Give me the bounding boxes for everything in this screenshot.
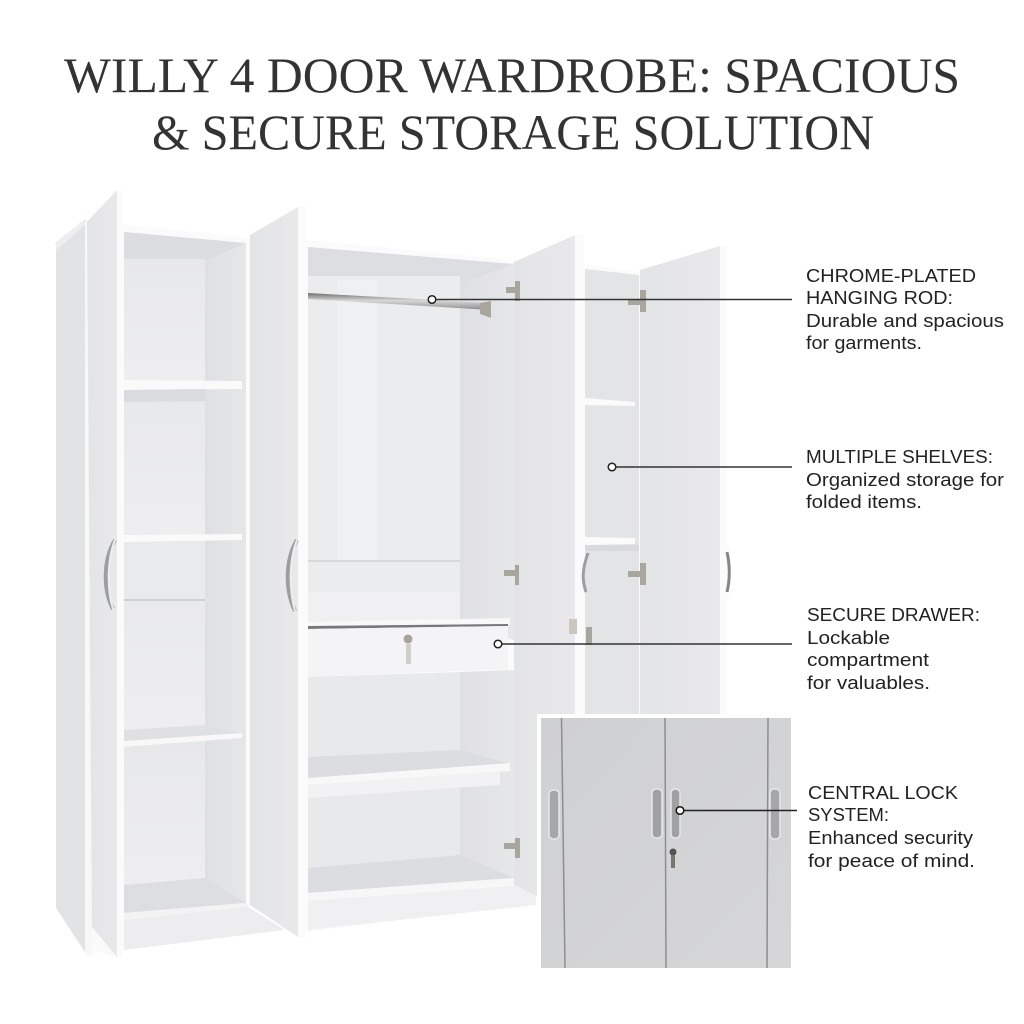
label: central lock: for peace of mind. — [808, 851, 975, 871]
callout: hanging rod line — [428, 296, 792, 303]
drawer lock — [404, 634, 412, 664]
shelf upper — [585, 398, 635, 406]
callout: drawer line — [494, 640, 792, 648]
label: hanging rod: for garments. — [806, 333, 922, 353]
label: central lock: Enhanced security — [808, 828, 973, 848]
label: central lock: SYSTEM: — [808, 805, 889, 825]
door 3 — [504, 235, 584, 915]
label: multiple shelves — [806, 447, 1004, 512]
shelf lower — [585, 537, 635, 545]
title — [64, 47, 960, 160]
door 1 — [87, 190, 123, 957]
door 2 handle — [288, 540, 297, 611]
inset handles — [549, 789, 780, 839]
label: hanging rod: CHROME-PLATED — [806, 266, 976, 286]
callout: lock line — [676, 807, 797, 814]
door seams — [562, 718, 768, 968]
inset: central lock close-up — [537, 714, 794, 972]
inset key lock — [670, 848, 676, 868]
lower compartment — [308, 670, 536, 930]
inner handle — [583, 553, 588, 592]
door 4 handle — [727, 552, 729, 592]
left side panel — [55, 219, 117, 957]
shelf 2 — [124, 534, 242, 736]
shelf 3 — [124, 725, 242, 885]
right compartment — [583, 264, 640, 714]
label: secure drawer — [807, 605, 980, 693]
label: secure drawer: SECURE DRAWER: — [807, 605, 980, 625]
label: central lock: CENTRAL LOCK — [808, 783, 958, 803]
door 4 — [628, 246, 729, 714]
shelf 1 — [124, 380, 242, 538]
label: hanging rod — [806, 266, 1004, 353]
label: hanging rod: Durable and spacious — [806, 311, 1004, 331]
centre compartment — [306, 240, 536, 932]
door 4 hinges — [628, 290, 646, 585]
label: secure drawer: Lockable — [807, 628, 890, 648]
cabinet floor — [124, 878, 285, 950]
label: central lock — [808, 783, 975, 871]
title: & SECURE STORAGE SOLUTION — [152, 104, 874, 160]
label: multiple shelves: folded items. — [806, 492, 922, 512]
left compartment — [122, 224, 285, 950]
label: secure drawer: compartment — [807, 650, 929, 670]
door 2 — [250, 207, 306, 937]
wardrobe illustration — [55, 190, 729, 957]
label: multiple shelves: MULTIPLE SHELVES: — [806, 447, 993, 467]
label: multiple shelves: Organized storage for — [806, 470, 1004, 490]
door 1 handle — [106, 540, 115, 609]
small lock — [586, 627, 592, 645]
callout: shelves line — [608, 463, 792, 471]
title: WILLY 4 DOOR WARDROBE: SPACIOUS — [64, 47, 960, 103]
label: hanging rod: HANGING ROD: — [806, 288, 953, 308]
drawer — [308, 618, 510, 677]
hanging rod — [308, 293, 491, 318]
hinges — [504, 281, 577, 858]
label: secure drawer: for valuables. — [807, 673, 930, 693]
